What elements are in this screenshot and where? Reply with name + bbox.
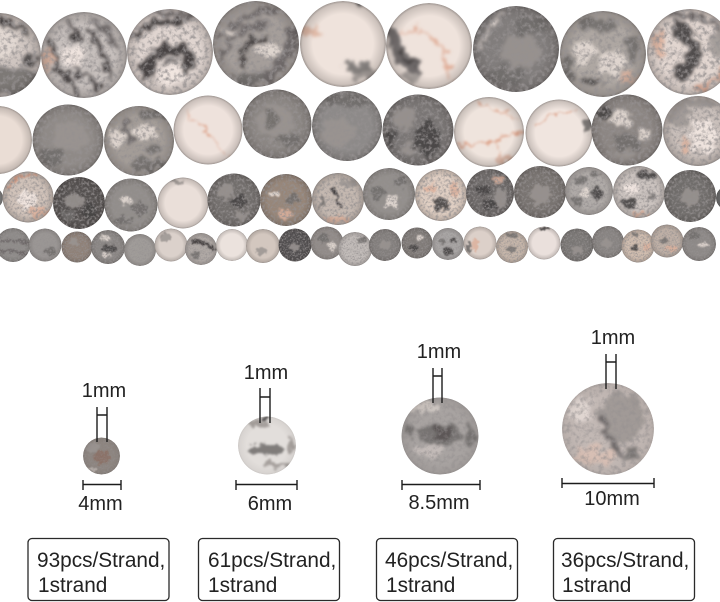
bead (40, 12, 127, 98)
bead (300, 0, 386, 87)
bead (663, 96, 720, 166)
bead (174, 96, 242, 164)
bead (310, 226, 344, 260)
bead (496, 231, 528, 263)
bead (565, 167, 613, 215)
bead (664, 170, 716, 222)
bead (0, 190, 3, 206)
bead (104, 106, 174, 176)
bead (0, 228, 30, 262)
label: 8.5mm: 8.5mm (408, 492, 470, 514)
bead (473, 6, 559, 92)
photo: four bead strands (0, 0, 720, 266)
bead (682, 227, 716, 261)
bead (312, 173, 364, 225)
bead (158, 178, 208, 228)
bead (62, 232, 92, 262)
bead (216, 229, 248, 261)
quantity box: 10mm: 36pcs/Strand, (561, 549, 689, 572)
bead: 8.5mm (402, 398, 478, 474)
bead (466, 169, 514, 217)
label: hole 1mm: 1mm (82, 380, 126, 402)
quantity box: 4mm (28, 538, 169, 600)
bead (464, 226, 496, 260)
size diagram: 4mm (78, 380, 126, 515)
label: 4mm: 4mm (78, 493, 123, 515)
bead: 10mm (562, 383, 654, 475)
bead (242, 90, 312, 158)
bead: 4mm (83, 438, 120, 474)
size diagram: 8.5mm (402, 341, 480, 514)
quantity box: 10mm: 1strand (562, 574, 631, 597)
bead (124, 234, 156, 266)
hole width marker (606, 354, 616, 389)
bead (528, 226, 560, 260)
size diagram: 6mm (236, 362, 297, 515)
bead (32, 104, 104, 176)
bead (53, 177, 105, 229)
quantity box: 4mm: 1strand (38, 574, 107, 597)
bead (0, 13, 45, 97)
bead (208, 174, 260, 226)
label: hole 1mm: 1mm (591, 327, 635, 349)
bead (338, 232, 372, 266)
bead (613, 166, 665, 218)
bead (185, 233, 217, 265)
bead (454, 97, 524, 167)
quantity box: 4mm: 93pcs/Strand, (37, 549, 165, 572)
quantity box: 8.5mm: 46pcs/Strand, (385, 549, 513, 572)
hole width marker (260, 388, 270, 423)
strand 1: 10mm beads (0, 0, 720, 98)
label: 6mm: 6mm (248, 493, 292, 515)
bead (560, 228, 594, 262)
bead (386, 3, 472, 89)
bead (91, 230, 125, 264)
diameter marker (83, 480, 121, 490)
quantity box: 8.5mm: 1strand (386, 574, 455, 597)
quantity box: 8.5mm (376, 538, 518, 600)
bead (592, 94, 662, 166)
bead (415, 169, 467, 221)
bead (260, 174, 312, 226)
strand 4: 4mm beads (0, 224, 716, 266)
bead (363, 168, 415, 220)
bead (382, 94, 454, 166)
bead (246, 229, 280, 263)
bead (526, 100, 592, 166)
bead (369, 229, 401, 261)
bead (127, 9, 213, 95)
bead (28, 228, 62, 262)
diameter marker (236, 480, 297, 490)
quantity box: 10mm (554, 538, 694, 600)
label: hole 1mm: 1mm (417, 341, 461, 363)
bead: 6mm (238, 414, 296, 474)
quantity box: 6mm: 61pcs/Strand, (208, 549, 336, 572)
bead (104, 178, 158, 232)
quantity box: 6mm (198, 538, 340, 600)
size diagram: 10mm (562, 327, 654, 510)
strand 3: 6mm beads (0, 166, 720, 232)
bead (592, 226, 624, 258)
bead (560, 11, 646, 97)
bead (3, 172, 54, 222)
hole width marker (433, 368, 442, 403)
bead (402, 228, 432, 258)
bead (0, 106, 32, 174)
label: 10mm: 10mm (584, 488, 640, 510)
hole width marker (97, 407, 107, 442)
bead (213, 1, 299, 87)
bead (514, 166, 566, 218)
bead (622, 230, 654, 262)
label: hole 1mm: 1mm (244, 362, 288, 384)
diameter marker (402, 480, 480, 490)
bead (716, 189, 720, 207)
bead (647, 9, 720, 95)
strand 2: 8.5mm beads (0, 90, 720, 176)
quantity box: 6mm: 1strand (208, 574, 277, 597)
bead (650, 224, 684, 258)
bead (154, 228, 188, 262)
bead (432, 228, 464, 260)
bead (312, 91, 382, 161)
diameter marker (562, 478, 654, 488)
bead (278, 228, 312, 262)
